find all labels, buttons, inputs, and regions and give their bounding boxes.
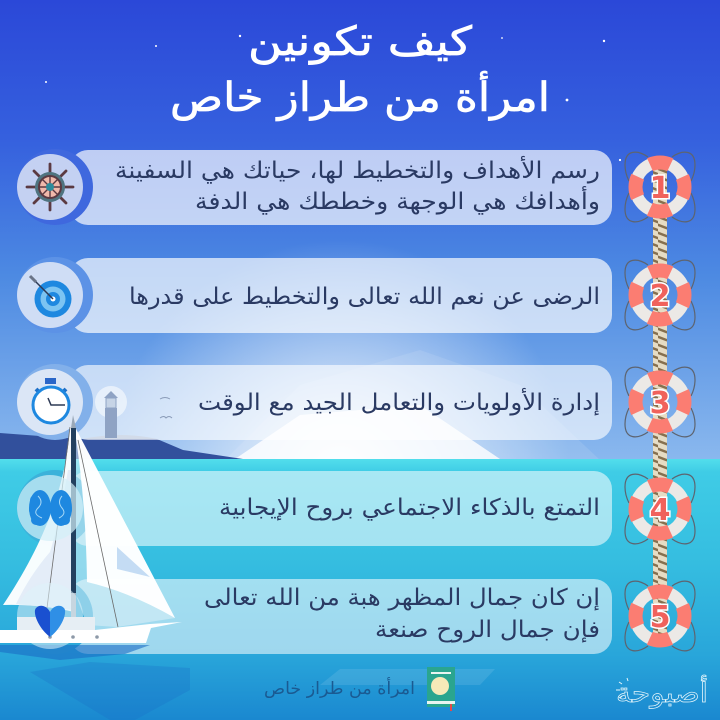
icon circle 2: [17, 262, 83, 328]
lifebuoy 1: 1: [650, 171, 670, 206]
distant island: [0, 433, 243, 459]
icon ring 5: [17, 578, 93, 654]
island hill: [83, 435, 157, 439]
lifebuoy 3: 3: [650, 386, 670, 421]
lifebuoy 2: 2: [650, 279, 670, 314]
title: كيف تكونين: [248, 19, 473, 65]
icon circle 4: [17, 475, 83, 541]
logo: أصبوحة: [616, 674, 708, 709]
icon circle 3: [17, 369, 83, 435]
main sail: [74, 425, 175, 618]
title: امرأة من طراز خاص: [170, 71, 550, 121]
icon: heart: [35, 606, 65, 637]
step 1: [17, 149, 695, 225]
lifebuoy 3: [625, 367, 695, 437]
step 3: [17, 364, 695, 440]
icon ring 3: [17, 364, 93, 440]
genoa sail: [74, 426, 175, 627]
footer credit: [264, 667, 495, 711]
card 4: [70, 471, 612, 546]
icon circle 5: [17, 583, 83, 649]
text 2: الرضى عن نعم الله تعالى والتخطيط على قدرها: [129, 284, 600, 310]
lifebuoy 2: [625, 260, 695, 330]
icon ring 4: [17, 470, 93, 546]
text 3: إدارة الأولويات والتعامل الجيد مع الوقت: [198, 388, 600, 416]
card 2: [70, 258, 612, 333]
icon: brain: [29, 490, 72, 526]
boat reflection: [0, 645, 190, 720]
lifebuoy 5: 5: [650, 600, 670, 635]
card 1: [70, 150, 612, 225]
background: sky: [0, 0, 720, 460]
icon circle 1: [17, 154, 83, 220]
text 1: [115, 156, 600, 215]
mast: [71, 415, 76, 625]
footer text: امرأة من طراز خاص: [264, 677, 415, 699]
text 5: [204, 585, 600, 643]
rope: [653, 168, 667, 638]
text 5: فإن جمال الروح صنعة: [375, 617, 600, 643]
background: sea: [0, 459, 720, 720]
title: [170, 19, 550, 121]
text 4: التمتع بالذكاء الاجتماعي بروح الإيجابية: [219, 495, 600, 521]
jib sail: [3, 427, 74, 612]
text 5: إن كان جمال المظهر هبة من الله تعالى: [204, 585, 600, 611]
boat cabin: [17, 617, 95, 631]
icon: stopwatch: [33, 378, 69, 423]
lifebuoy 4: [625, 474, 695, 544]
sailboat: [0, 415, 190, 720]
lighthouse: [95, 386, 127, 438]
step 4: [17, 470, 695, 546]
lifebuoy 4: 4: [650, 493, 670, 528]
book icon: [427, 667, 455, 711]
step 5: [17, 578, 695, 654]
lifebuoy 1: [625, 152, 695, 222]
card 5: [70, 579, 612, 654]
footer band: [320, 669, 495, 685]
boat hull: [0, 622, 182, 643]
icon: target: [30, 276, 72, 318]
card 3: [70, 365, 612, 440]
step 2: [17, 257, 695, 333]
text 1: رسم الأهداف والتخطيط لها، حياتك هي السفينة: [115, 156, 600, 184]
birds: [160, 398, 172, 418]
lifebuoy 5: [625, 581, 695, 651]
background: stars: [45, 35, 621, 161]
icon ring 1: [17, 149, 93, 225]
icon: ship wheel: [27, 164, 73, 210]
icon ring 2: [17, 257, 93, 333]
text 1: وأهدافك هي الوجهة وخططك هي الدفة: [195, 186, 600, 215]
rigging: [47, 427, 118, 627]
background: sun glow: [0, 230, 720, 460]
